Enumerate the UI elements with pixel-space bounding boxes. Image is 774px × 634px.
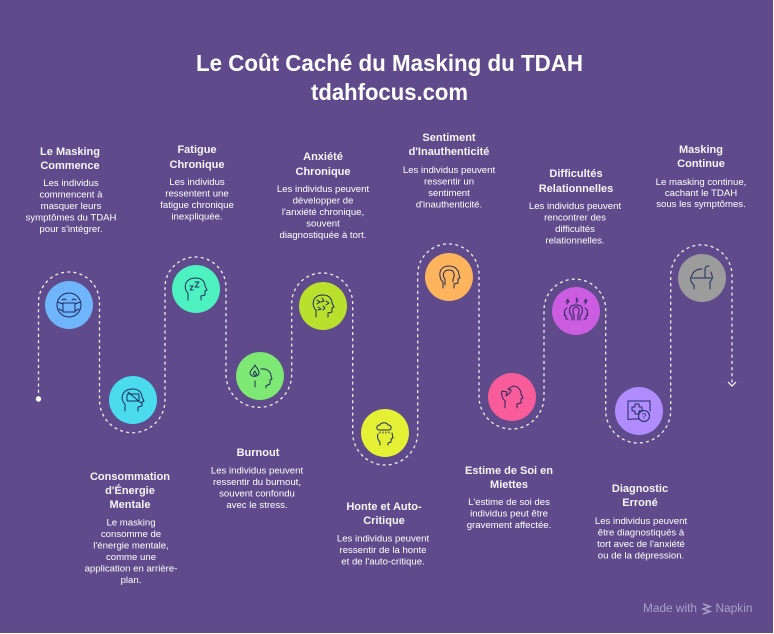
title: [196, 50, 583, 105]
step 10: Diagnostic Erroné: Erroné: [622, 497, 658, 509]
step 10: Diagnostic Erroné: tort avec de l'anxiété: [597, 539, 685, 550]
step 11: Masking Continue: Le masking continue,: [656, 177, 746, 188]
step 2: Consommation d'Énergie Mentale: [85, 376, 177, 586]
step 2: Consommation d'Énergie Mentale: Consommation: [90, 471, 170, 483]
step 3: Fatigue Chronique: Chronique: [170, 159, 224, 171]
icon: head under rain cloud: [361, 409, 409, 457]
step 6: Honte et Auto-Critique: ressentir de la honte: [340, 545, 426, 556]
step 1: Le Masking Commence: Commence: [40, 160, 100, 172]
step 3: Fatigue Chronique: inexpliquée.: [171, 212, 223, 222]
step 2: Consommation d'Énergie Mentale: consomme de: [101, 529, 161, 540]
step 11: Masking Continue: cachant le TDAH: [665, 188, 737, 199]
icon: cracked head: [488, 373, 536, 421]
step 7: Sentiment d'Inauthenticité: sentiment: [428, 188, 470, 199]
step 11: Masking Continue: Masking: [679, 144, 723, 156]
footer: Made with Napkin: Napkin: [716, 603, 752, 615]
icon: speech bubble with medical cross and question mark: ?: [642, 412, 647, 421]
step 11: Masking Continue: Continue: [677, 158, 725, 170]
step 1: Le Masking Commence: commencent à: [40, 190, 103, 200]
step 2: Consommation d'Énergie Mentale: Le masking: [106, 518, 156, 528]
path start dot: [36, 396, 41, 402]
step 5: Anxiété Chronique: Les individus peuvent: [277, 184, 369, 195]
step 3: Fatigue Chronique: Fatigue: [177, 144, 217, 156]
step 8: Estime de Soi en Miettes: L'estime de soi des: [468, 497, 550, 508]
step 1: Le Masking Commence: [26, 146, 117, 329]
step 3: Fatigue Chronique: ressentent une: [165, 188, 229, 200]
step 9: Difficultés Relationnelles: [529, 168, 621, 335]
step 4: Burnout: ressentir du burnout,: [213, 477, 301, 488]
step 9: Difficultés Relationnelles: relationnelles.: [545, 236, 605, 246]
icon: Napkin logo: [703, 604, 710, 614]
step 2: Consommation d'Énergie Mentale: d'Énergie: [105, 484, 155, 497]
step 2: Consommation d'Énergie Mentale: comme une: [106, 552, 156, 563]
icon: speech bubble with medical cross and question mark: [615, 387, 663, 435]
step 3: Fatigue Chronique: Les individus: [169, 177, 225, 188]
title: tdahfocus.com: [311, 79, 468, 105]
step 4: Burnout: [211, 352, 303, 511]
icon: head with drained battery: [109, 376, 157, 424]
step 2: Consommation d'Énergie Mentale: application en arrière-: [85, 564, 177, 574]
icon: head inside head: [425, 253, 473, 301]
icon: face with mask: [45, 281, 93, 329]
step 2: Consommation d'Énergie Mentale: l'énergie mentale,: [93, 540, 169, 552]
footer: Made with Napkin: [643, 603, 752, 615]
step 6: Honte et Auto-Critique: et de l'auto-critique.: [341, 556, 425, 568]
step 6: Honte et Auto-Critique: Honte et Auto-: [346, 501, 422, 513]
step 10: Diagnostic Erroné: [595, 387, 687, 562]
step 9: Difficultés Relationnelles: Relationnelles: [539, 183, 613, 195]
step 7: Sentiment d'Inauthenticité: [403, 132, 495, 301]
step 4: Burnout: souvent confondu: [219, 488, 295, 500]
step 6: Honte et Auto-Critique: Critique: [363, 515, 405, 527]
step 9: Difficultés Relationnelles: Les individus peuvent: [529, 201, 621, 212]
step 9: Difficultés Relationnelles: difficultés: [555, 224, 595, 235]
step 5: Anxiété Chronique: développer de: [293, 196, 353, 206]
step 8: Estime de Soi en Miettes: [465, 373, 553, 531]
step 5: Anxiété Chronique: diagnostiquée à tort.: [280, 230, 366, 241]
step 4: Burnout: Burnout: [237, 447, 280, 459]
step 9: Difficultés Relationnelles: rencontrer des: [544, 212, 606, 224]
step 5: Anxiété Chronique: Chronique: [296, 166, 350, 178]
step 1: Le Masking Commence: masquer leurs: [41, 201, 102, 212]
step 8: Estime de Soi en Miettes: individus peut être: [470, 508, 548, 520]
step 11: Masking Continue: [656, 144, 746, 302]
step 1: Le Masking Commence: symptômes du TDAH: [26, 212, 117, 224]
icon: sleeping head: [172, 265, 220, 313]
step 5: Anxiété Chronique: souvent: [306, 218, 340, 230]
step 5: Anxiété Chronique: l'anxiété chronique,: [282, 207, 364, 218]
step 1: Le Masking Commence: pour s'intégrer.: [39, 224, 103, 235]
step 3: Fatigue Chronique: fatigue chronique: [160, 200, 234, 211]
step 10: Diagnostic Erroné: être diagnostiqués à: [598, 528, 685, 538]
step 2: Consommation d'Énergie Mentale: Mentale: [110, 499, 150, 511]
title: Le Coût Caché du Masking du TDAH: [196, 50, 583, 76]
step 5: Anxiété Chronique: [277, 151, 369, 330]
step 9: Difficultés Relationnelles: Difficultés: [549, 168, 603, 180]
path end arrow: [728, 382, 736, 386]
step 7: Sentiment d'Inauthenticité: d'Inauthenticité: [409, 146, 489, 158]
step 1: Le Masking Commence: Le Masking: [40, 146, 100, 158]
step 10: Diagnostic Erroné: Diagnostic: [612, 483, 668, 495]
step 8: Estime de Soi en Miettes: Estime de Soi en: [465, 465, 553, 477]
step 10: Diagnostic Erroné: Les individus peuvent: [595, 516, 687, 527]
step 4: Burnout: avec le stress.: [226, 500, 288, 511]
icon: anxious head: [299, 282, 347, 330]
step 6: Honte et Auto-Critique: Les individus peuvent: [337, 534, 429, 544]
icon: divided head: [678, 254, 726, 302]
step 4: Burnout: Les individus peuvent: [211, 466, 303, 476]
footer: Made with Napkin: Made with: [643, 603, 697, 615]
step 7: Sentiment d'Inauthenticité: Les individus peuvent: [403, 165, 495, 176]
step 7: Sentiment d'Inauthenticité: d'inauthenticité.: [416, 200, 482, 210]
step 3: Fatigue Chronique: [160, 144, 234, 313]
step 6: Honte et Auto-Critique: [337, 409, 429, 568]
step 2: Consommation d'Énergie Mentale: plan.: [121, 575, 141, 586]
step 11: Masking Continue: sous les symptômes.: [656, 199, 746, 210]
icon: two heads with lightning: [552, 287, 600, 335]
dashed timeline path: [36, 244, 736, 465]
step 5: Anxiété Chronique: Anxiété: [303, 151, 343, 163]
step 8: Estime de Soi en Miettes: Miettes: [490, 479, 528, 491]
icon: head with burning match: [236, 352, 284, 400]
step 1: Le Masking Commence: Les individus: [43, 178, 99, 189]
step 10: Diagnostic Erroné: ou de la dépression.: [598, 550, 684, 562]
step 7: Sentiment d'Inauthenticité: ressentir un: [424, 176, 474, 188]
step 7: Sentiment d'Inauthenticité: Sentiment: [422, 132, 476, 144]
step 8: Estime de Soi en Miettes: gravement affectée.: [467, 520, 551, 531]
